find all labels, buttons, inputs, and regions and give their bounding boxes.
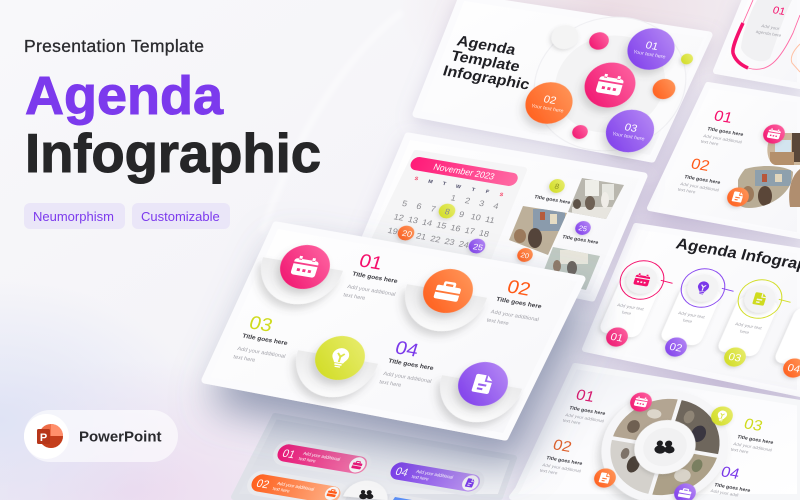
tile title: Title goes here: [561, 234, 599, 246]
photo: whiteboard: [544, 247, 600, 290]
calendar days: 18: [478, 228, 491, 239]
photo: bookshelf group: [509, 206, 567, 255]
calendar days: 13: [407, 214, 420, 225]
step 3 ring: here: [739, 329, 750, 335]
weekday labels: [414, 176, 504, 198]
tab caption: Add your: [761, 23, 781, 31]
bubble: center calendar: [579, 59, 641, 111]
photo right: [789, 169, 800, 207]
step 4: [378, 336, 522, 428]
icon: powerpoint logo: [37, 424, 63, 448]
step 3 ring: [728, 277, 796, 340]
item 01: Title goes here: [706, 126, 744, 138]
calendar days: 14: [421, 217, 434, 228]
step 4 tab: [773, 307, 800, 368]
bubble: 03: 03: [623, 122, 639, 135]
card: 01 02 with leaf photos: [650, 85, 800, 236]
item 01: 01: [712, 108, 735, 127]
pill 02: text here: [272, 486, 291, 494]
label: Add your additional: [346, 284, 396, 298]
label: Add your additional: [236, 346, 286, 360]
calendar days: 24: [458, 239, 470, 250]
item 03: Add your additional: [733, 441, 773, 452]
tab number: 01: [771, 5, 787, 18]
tag: customizable: [132, 203, 230, 229]
pill 01: text here: [298, 456, 317, 464]
item 02: Add your additional: [542, 462, 582, 473]
step 2 tab: [659, 285, 723, 346]
item 02: text here: [677, 187, 697, 194]
heading block: [24, 36, 321, 184]
label: text here: [486, 318, 509, 327]
item 01: text here: [562, 418, 582, 425]
step 1 ring: Add your text: [617, 302, 645, 312]
calendar days: 22: [429, 234, 442, 244]
orbit rings: [517, 6, 703, 162]
photo wheel: [587, 382, 743, 500]
step 1 ring: here: [621, 310, 632, 316]
label: [486, 275, 550, 332]
card: bottom pills: [234, 416, 514, 500]
card title: Agenda: [455, 33, 518, 59]
pill 02: [243, 468, 352, 500]
calendar days: 21: [415, 231, 428, 242]
step 3 ring: Add your text: [735, 321, 763, 331]
bubble: 02: 02: [542, 94, 558, 107]
item 02: [677, 155, 728, 198]
pill 04: Add your additional: [415, 469, 454, 480]
item 01: text here: [700, 139, 720, 146]
item 01: Title goes here: [568, 405, 606, 417]
bubble: white: [548, 23, 582, 51]
tab caption: agenda here: [755, 29, 782, 38]
label: Title goes here: [351, 271, 399, 285]
card title: Template: [449, 48, 522, 75]
step 3 tab: [716, 296, 780, 357]
calendar days: [387, 193, 500, 253]
icon circle: [417, 265, 479, 317]
icon circle: [274, 241, 336, 293]
item 04: 04: [719, 464, 742, 483]
item 04: Title goes here: [713, 482, 751, 494]
weekday labels: T: [471, 187, 477, 193]
tile: 20: [515, 247, 535, 263]
title: agenda: Agenda: [25, 66, 224, 126]
label: [342, 249, 407, 306]
badge lime: [709, 405, 735, 427]
bubble: 03: Your text here: [611, 131, 645, 142]
item 01: Add your additional: [565, 412, 605, 423]
item 02: 02: [551, 437, 574, 456]
weekday labels: F: [485, 189, 490, 195]
weekday labels: S: [499, 192, 504, 198]
calendar days: 5: [401, 198, 409, 208]
calendar days: 6: [415, 201, 423, 211]
item 03: text here: [730, 447, 750, 454]
calendar days: 4: [492, 201, 500, 211]
tab shape: [741, 0, 792, 61]
item 04: Add your addi: [710, 488, 739, 498]
bubble: small pink lower: [570, 124, 590, 140]
item 04: [710, 463, 757, 499]
item 01: 01: [574, 387, 597, 406]
item 02: 02: [689, 156, 712, 175]
bubble: 01: [622, 25, 680, 73]
pill 04: 04: [393, 466, 410, 479]
card: agenda template infographic: [416, 0, 709, 162]
calendar days: 1: [450, 193, 458, 203]
bowl: [430, 375, 522, 428]
item 03: 03: [742, 416, 765, 435]
item 02: Title goes here: [545, 455, 583, 467]
number 01: [604, 326, 630, 348]
calendar days: 8: [444, 207, 452, 217]
badge pink: [761, 123, 787, 145]
card: calendar: [360, 136, 644, 298]
card: top right pink tab: [716, 0, 800, 86]
number 01: 01: [609, 331, 625, 344]
calendar days: 16: [449, 223, 462, 233]
label: [232, 311, 297, 368]
calendar panel: [372, 153, 524, 264]
number 02: [663, 336, 689, 358]
pill 02: Add your additional: [276, 481, 315, 492]
bowl: [395, 284, 487, 337]
badge pink: [628, 391, 654, 413]
calendar days: 19: [387, 225, 399, 236]
badge orange: [592, 467, 618, 489]
label: 01: [357, 250, 385, 274]
calendar days: 20: [401, 228, 414, 239]
step 2 ring: here: [682, 318, 693, 324]
label: Add your additional: [382, 371, 432, 385]
pill blue: [388, 493, 432, 500]
calendar days: 23: [443, 236, 456, 247]
item 01: [562, 386, 613, 429]
item 01: [700, 107, 751, 150]
calendar days: 3: [478, 198, 486, 208]
badge: powerpoint: [24, 410, 178, 462]
thin pink outline: [743, 0, 800, 69]
calendar days: 7: [429, 204, 437, 214]
item 02: [539, 436, 590, 479]
label: Add your additional: [490, 309, 539, 323]
pill 01: 01: [280, 448, 297, 461]
step 1 tab: [598, 277, 662, 338]
card: main four-step agenda: [205, 225, 582, 437]
icon: powerpoint logo: P: [40, 432, 47, 444]
bubble: 01: 01: [644, 40, 660, 53]
bubble: small lime: [680, 53, 694, 65]
day highlights: [396, 202, 487, 255]
card title: Infographic: [441, 63, 532, 93]
bubble: 01: Your text here: [632, 49, 666, 60]
step 2 ring: Add your text: [678, 310, 706, 320]
label: 03: [247, 312, 275, 336]
tag: neumorphism: [24, 203, 125, 229]
calendar days: 2: [464, 196, 472, 206]
icon circle: [452, 358, 514, 410]
pill 01: [269, 438, 376, 480]
calendar days: 17: [464, 225, 476, 236]
photo: meeting at window: [568, 178, 624, 219]
tile title: Title goes here: [533, 194, 571, 206]
icon circle: [309, 332, 371, 384]
label: [378, 336, 443, 393]
calendar days: 11: [484, 214, 496, 225]
label: 04: [393, 337, 421, 361]
item 02: Add your additional: [680, 181, 720, 192]
bowl: [251, 257, 343, 310]
tile: 8: 8: [553, 182, 561, 191]
number 03: [722, 346, 748, 368]
label: text here: [378, 379, 402, 389]
photo top: [767, 133, 800, 165]
pill 02: 02: [254, 478, 271, 491]
label: text here: [232, 354, 256, 364]
number 02: 02: [668, 341, 684, 354]
pill 04: text here: [411, 474, 430, 482]
month bar: [408, 156, 520, 187]
label: text here: [342, 292, 366, 302]
photo tiles panel: [508, 175, 582, 258]
calendar days: 12: [393, 212, 405, 223]
month bar: November 2023: [432, 162, 496, 182]
tile: 25: [573, 220, 593, 236]
card: circular photo wheel: [512, 366, 800, 500]
label: Title goes here: [387, 358, 435, 372]
step 1 ring: [610, 258, 678, 321]
badge purple: [672, 482, 698, 500]
item 02: Title goes here: [683, 174, 721, 186]
step 3: [232, 311, 378, 403]
card: agenda infographic timeline: [585, 226, 800, 394]
calendar days: 25: [472, 242, 485, 253]
calendar days: 15: [435, 220, 448, 231]
item 03: [730, 415, 781, 458]
bubble: 03: [600, 106, 660, 156]
tile: 8: [547, 178, 567, 194]
item 03: Title goes here: [736, 434, 774, 446]
title: infographic: Infographic: [25, 123, 321, 184]
weekday labels: W: [455, 184, 462, 190]
label: Title goes here: [495, 296, 543, 310]
item 02: text here: [539, 468, 559, 475]
bowl: [286, 350, 378, 403]
pill 01: Add your additional: [302, 451, 341, 462]
bubble: 02: [520, 79, 578, 127]
badge orange: [725, 186, 751, 208]
number 03: 03: [727, 351, 743, 364]
calendar days: 10: [470, 212, 482, 222]
eyebrow: Presentation Template: [24, 36, 204, 56]
badge label: PowerPoint: [79, 428, 162, 446]
weekday labels: T: [442, 181, 448, 187]
peach arc: [791, 44, 800, 72]
item 01: Add your additional: [703, 133, 743, 144]
number 04: [781, 357, 800, 379]
step 2 ring: [671, 266, 739, 329]
tab caption: [755, 23, 784, 38]
bubble: small orange: [650, 77, 678, 101]
bubble: small pink: [587, 31, 611, 51]
tile: 25: 25: [577, 224, 588, 233]
label: 02: [505, 276, 533, 300]
tile: 20: 20: [519, 251, 530, 260]
thick pink arc: [733, 23, 748, 68]
card title: [441, 32, 542, 93]
step 1: [251, 241, 407, 310]
center hub: [343, 477, 393, 500]
calendar days: 9: [458, 209, 466, 219]
label: Title goes here: [241, 333, 289, 347]
weekday labels: M: [427, 179, 433, 185]
photo bookshelf: [738, 166, 793, 208]
tag: neumorphism: Neumorphism: [33, 209, 114, 224]
bubble: 02: Your text here: [530, 103, 564, 114]
weekday labels: S: [414, 176, 419, 182]
pill 04: [382, 456, 489, 498]
step 2: [395, 265, 550, 337]
tag: customizable: Customizable: [141, 209, 220, 224]
